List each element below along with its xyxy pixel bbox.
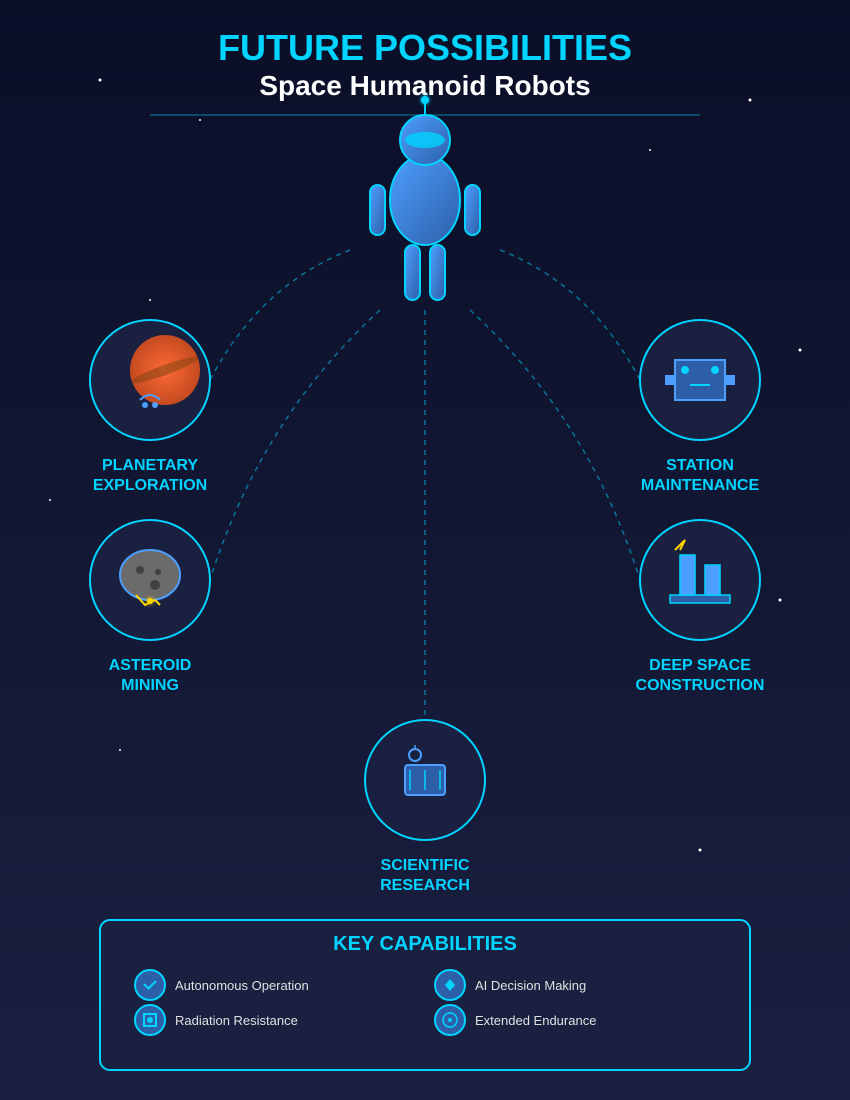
- title: FUTURE POSSIBILITIES: [218, 27, 632, 68]
- icon: research lab: [405, 745, 445, 795]
- central humanoid robot: [370, 96, 480, 300]
- connector lines: [210, 250, 640, 720]
- panel: planetary exploration: [90, 320, 210, 494]
- capability: extended endurance: Extended Endurance: [475, 1013, 596, 1028]
- heading: KEY CAPABILITIES: [333, 933, 517, 955]
- capability: radiation resistance: [135, 1005, 298, 1035]
- capability: ai decision making: [435, 970, 586, 1000]
- label: MINING: [121, 677, 179, 694]
- label: CONSTRUCTION: [636, 677, 764, 694]
- label: PLANETARY: [102, 457, 198, 474]
- panel: key capabilities: [100, 920, 750, 1070]
- label: ASTEROID: [109, 657, 191, 674]
- icon: construction: [670, 540, 730, 603]
- label: DEEP SPACE: [649, 657, 751, 674]
- label: RESEARCH: [380, 877, 470, 894]
- label: STATION: [666, 457, 734, 474]
- panel: scientific research: [365, 720, 485, 894]
- icon: station: [665, 360, 735, 400]
- capability: autonomous operation: Autonomous Operation: [175, 978, 309, 993]
- panel: deep space construction: [636, 520, 764, 694]
- label: MAINTENANCE: [641, 477, 759, 494]
- subtitle: Space Humanoid Robots: [259, 70, 591, 101]
- panel: asteroid mining: [90, 520, 210, 694]
- icon: asteroid: [120, 550, 180, 605]
- label: EXPLORATION: [93, 477, 207, 494]
- capability: radiation resistance: Radiation Resistance: [175, 1013, 298, 1028]
- capability: extended endurance: [435, 1005, 596, 1035]
- icon: planet: [130, 335, 200, 408]
- label: SCIENTIFIC: [381, 857, 470, 874]
- capability: ai decision making: AI Decision Making: [475, 978, 586, 993]
- panel: station maintenance: [640, 320, 760, 494]
- capability: autonomous operation: [135, 970, 309, 1000]
